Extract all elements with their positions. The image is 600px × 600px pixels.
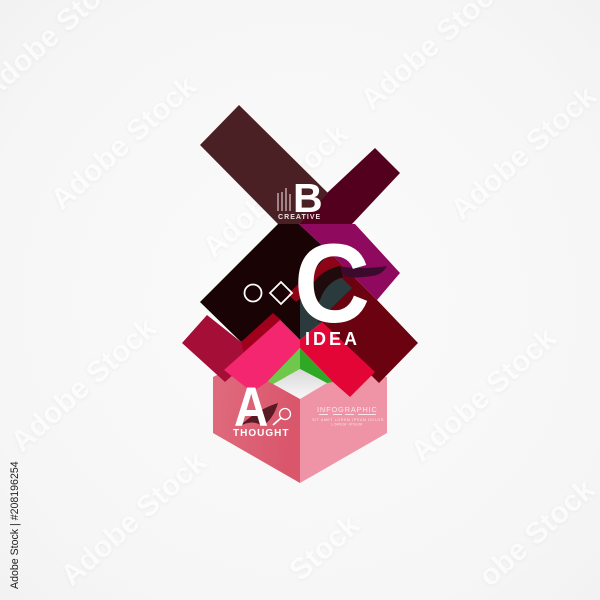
shape: dark wedge behind C (308, 266, 343, 312)
small body text: SIT AMET LOREM IPSUM DOLOR (312, 418, 384, 422)
label IDEA: IDEA (305, 329, 360, 349)
bar: dark maroon top right (299, 148, 400, 224)
icon: bars (278, 188, 290, 211)
shape: teal behind C (300, 278, 352, 340)
rule lines (319, 414, 376, 416)
panel: box left face (213, 350, 300, 483)
curve: dark crescent (337, 266, 387, 278)
letter B: B (293, 175, 323, 221)
infographic stack (182, 105, 418, 483)
box opening: green right (300, 348, 333, 383)
icon: leaf (240, 403, 278, 426)
icon: magnifier (273, 408, 290, 425)
watermarks: Adobe Stock (196, 117, 355, 265)
bar: brown top left (200, 105, 328, 224)
shadow: dark red under pink (241, 313, 281, 353)
panel: dark red right (300, 253, 418, 383)
panel: red diamond (300, 322, 375, 397)
watermarks: Adobe Stock (444, 79, 600, 227)
label INFOGRAPHIC: INFOGRAPHIC (317, 405, 378, 414)
box opening: green left (267, 348, 300, 384)
label THOUGHT: THOUGHT (233, 428, 289, 439)
watermarks: Adobe Stock (4, 311, 163, 459)
label CREATIVE: CREATIVE (278, 214, 321, 221)
panel: crimson left (182, 315, 272, 382)
watermarks: Adobe Stock (54, 445, 213, 593)
panel: box right face (300, 370, 387, 483)
icon: diamond (270, 282, 292, 304)
icon: circle (244, 284, 262, 302)
panel: hot pink diamond (224, 320, 300, 392)
credit text: Adobe Stock id: Adobe Stock | #208196254 (9, 461, 21, 589)
letter A: A (234, 376, 268, 439)
watermarks: obe Stock (473, 473, 600, 593)
watermarks: Adobe Stock (44, 69, 203, 217)
watermarks: Adobe Stock (404, 321, 563, 469)
panel: purple arrow (299, 224, 400, 300)
box opening: white inner (273, 369, 327, 399)
sliver: red behind C (288, 254, 342, 302)
panel: black left (200, 224, 330, 342)
small body text line 2: LOREM IPSUM (331, 422, 363, 426)
letter C: C (294, 222, 370, 347)
watermarks: Stock (283, 508, 366, 588)
